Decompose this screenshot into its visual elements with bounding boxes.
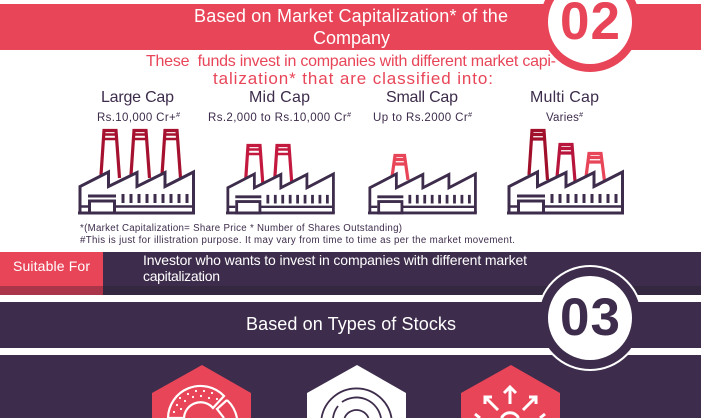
column: Multi Cap: Multi Cap xyxy=(530,89,599,106)
suitable for band: capitalization xyxy=(143,268,220,284)
icon: factory with three tall chimneys xyxy=(78,130,195,213)
column: Multi Cap xyxy=(507,89,624,213)
suitable for band xyxy=(0,252,701,295)
column: Large Cap: # xyxy=(176,112,180,119)
footnotes: #This is just for illistration purpose. It may vary from time to time as per the market movement. xyxy=(80,235,515,246)
section 03 header band xyxy=(0,302,701,348)
column: Small Cap: # xyxy=(468,112,472,119)
suitable for band: Investor who wants to invest in companies with different market xyxy=(143,252,527,268)
section 02 header band xyxy=(0,4,701,50)
column: Mid Cap: # xyxy=(347,112,351,119)
icon: hexagon with donut chart xyxy=(152,365,251,418)
column: Multi Cap: # xyxy=(579,112,583,119)
column: Mid Cap xyxy=(208,89,351,213)
icon: factory with two chimneys xyxy=(226,146,335,213)
footnotes: *(Market Capitalization= Share Price * Number of Shares Outstanding) xyxy=(80,223,402,234)
section 02 title: Company xyxy=(313,28,390,48)
suitable for band: Suitable For xyxy=(13,258,90,274)
icon: factory with chimneys of mixed height xyxy=(507,130,624,213)
section 02 title xyxy=(194,6,508,48)
column: Large Cap: Rs.10,000 Cr+ xyxy=(97,112,176,124)
badge 03 xyxy=(548,276,632,360)
section 02 intro text: These funds invest in companies with different market capi- xyxy=(146,53,556,70)
column: Small Cap: Up to Rs.2000 Cr xyxy=(373,112,468,124)
icon: factory with one chimney xyxy=(368,156,477,213)
column: Mid Cap: Rs.2,000 to Rs.10,000 Cr xyxy=(208,112,347,124)
section 02 intro text: talization* that are classified into: xyxy=(213,69,493,88)
section 02 title: Based on Market Capitalization* of the xyxy=(194,6,508,26)
section 03 title: Based on Types of Stocks xyxy=(246,314,456,334)
section 02 intro text xyxy=(146,53,556,88)
icon: hexagon with concentric arcs xyxy=(307,365,406,418)
icon: hexagon with radiating arrows xyxy=(461,365,560,418)
column: Multi Cap: Varies xyxy=(546,112,579,124)
column: Small Cap xyxy=(368,89,477,213)
badge 02 xyxy=(540,0,640,72)
lower dark panel xyxy=(0,355,701,418)
column: Large Cap xyxy=(78,89,195,213)
column: Mid Cap: Mid Cap xyxy=(249,89,310,106)
badge 03: 03 xyxy=(560,288,620,347)
footnotes xyxy=(80,223,515,246)
column: Large Cap: Large Cap xyxy=(101,89,174,106)
column: Small Cap: Small Cap xyxy=(386,89,458,106)
badge 03 ring xyxy=(537,265,643,371)
